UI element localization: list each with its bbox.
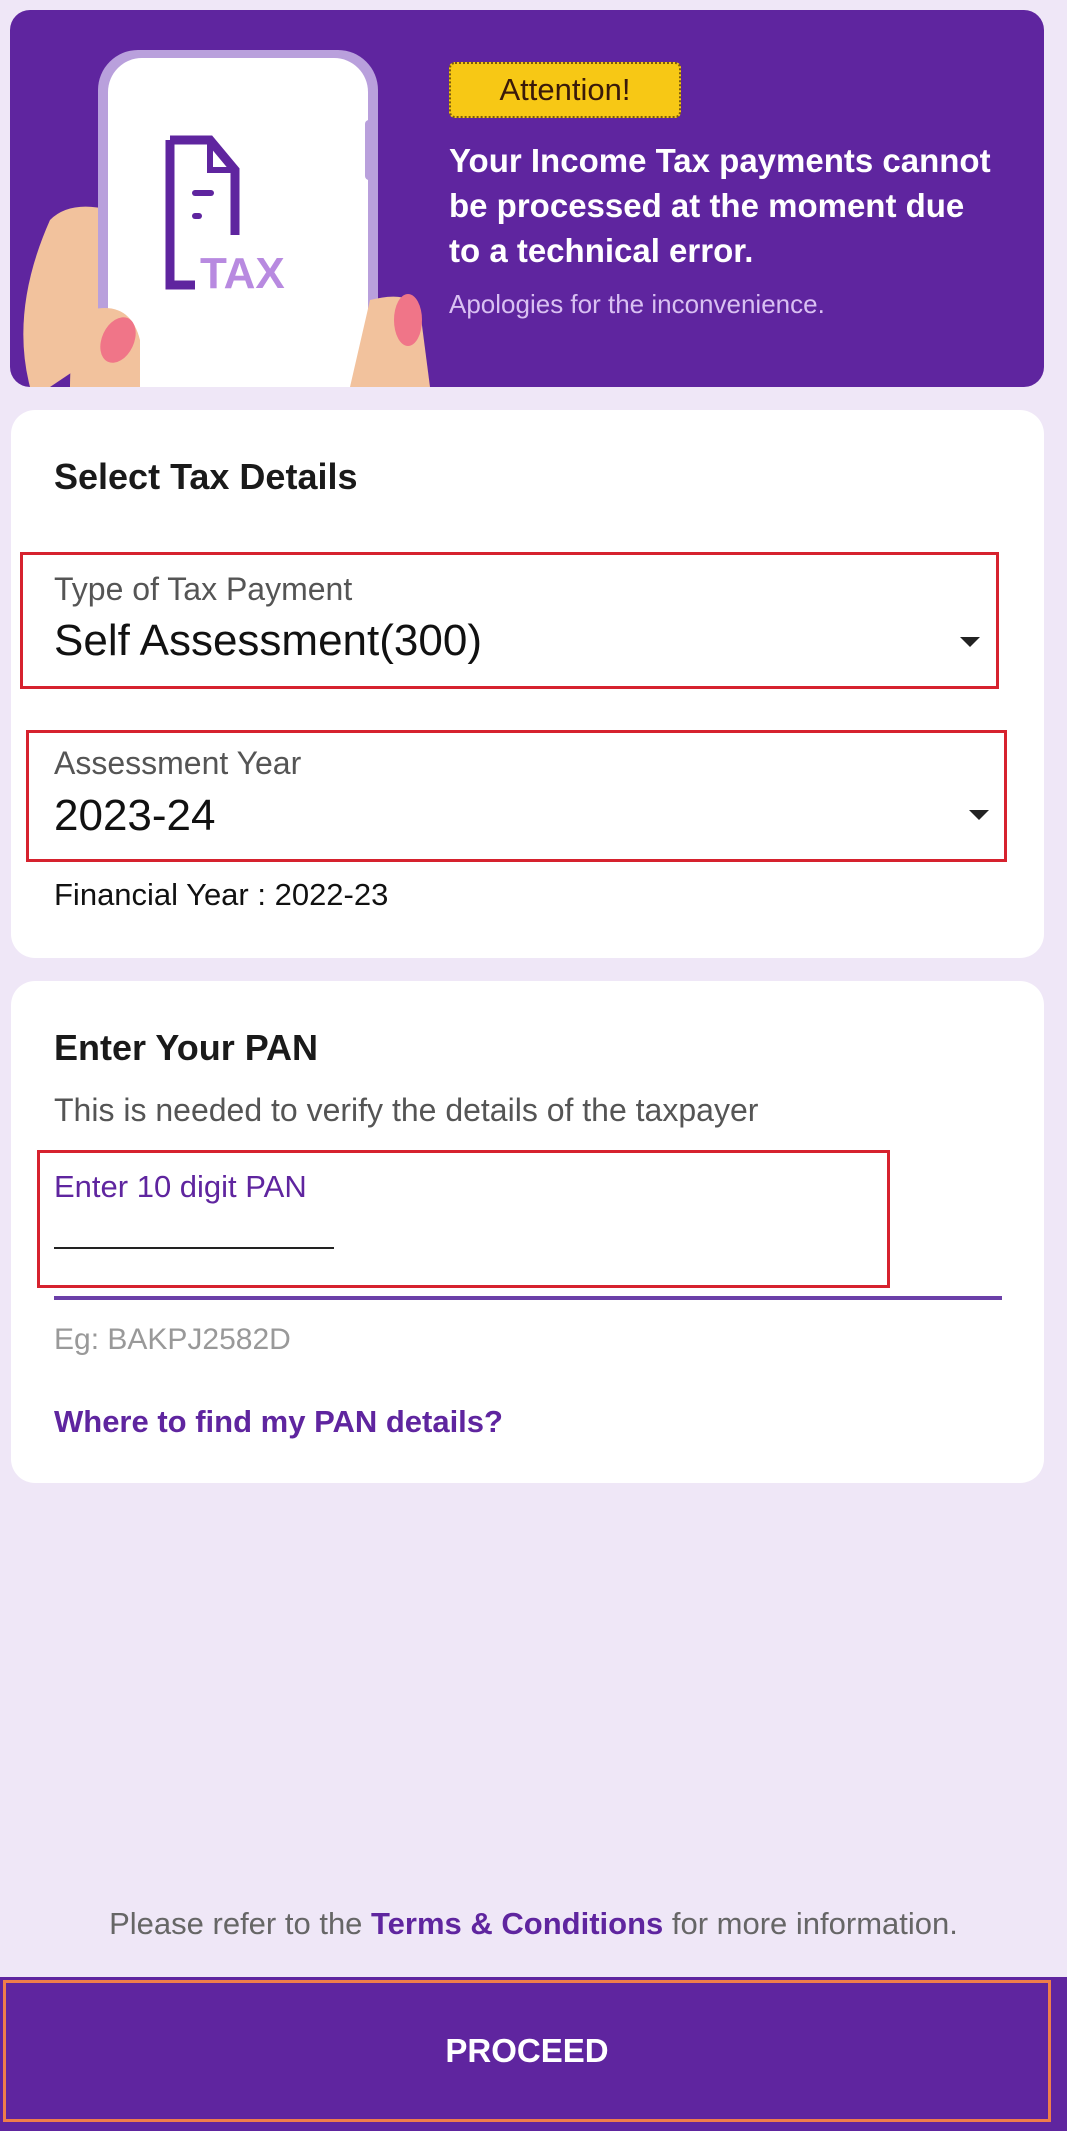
- financial year text: Financial Year : 2022-23: [54, 877, 388, 912]
- footer text: Please refer to the Terms & Conditions for more information.: [109, 1906, 958, 1941]
- banner: [10, 10, 1044, 387]
- illustration: hand holding phone with tax icon: [23, 50, 430, 387]
- panel: enter your PAN: [11, 981, 1044, 1483]
- field: assessment year: [26, 730, 1007, 862]
- field: type of tax payment: Self Assessment(300): [54, 616, 482, 665]
- illustration: hand holding phone with tax icon: TAX: [200, 249, 285, 298]
- headline text: [449, 142, 991, 269]
- field: type of tax payment: [20, 552, 999, 689]
- button: proceed: [0, 1977, 1067, 2131]
- heading: Enter Your PAN: [54, 1027, 318, 1068]
- apology text: Apologies for the inconvenience.: [449, 289, 825, 319]
- field: PAN input: Enter 10 digit PAN: [54, 1169, 307, 1204]
- description: This is needed to verify the details of the taxpayer: [54, 1092, 758, 1128]
- example text: Eg: BAKPJ2582D: [54, 1323, 291, 1356]
- badge: Attention: [449, 62, 681, 118]
- link: Where to find my PAN details?: [54, 1404, 503, 1439]
- headline text: to a technical error.: [449, 232, 753, 269]
- button: proceed: PROCEED: [445, 2032, 609, 2069]
- field: type of tax payment: Type of Tax Payment: [54, 571, 352, 607]
- headline text: Your Income Tax payments cannot: [449, 142, 991, 179]
- field: assessment year: 2023-24: [54, 791, 215, 840]
- underline: [54, 1296, 1002, 1300]
- field: assessment year: Assessment Year: [54, 745, 301, 781]
- heading: Select Tax Details: [54, 456, 358, 497]
- badge: Attention: Attention!: [500, 72, 630, 107]
- panel: select tax details: [11, 410, 1044, 958]
- headline text: be processed at the moment due: [449, 187, 964, 224]
- field: PAN input: [37, 1150, 890, 1288]
